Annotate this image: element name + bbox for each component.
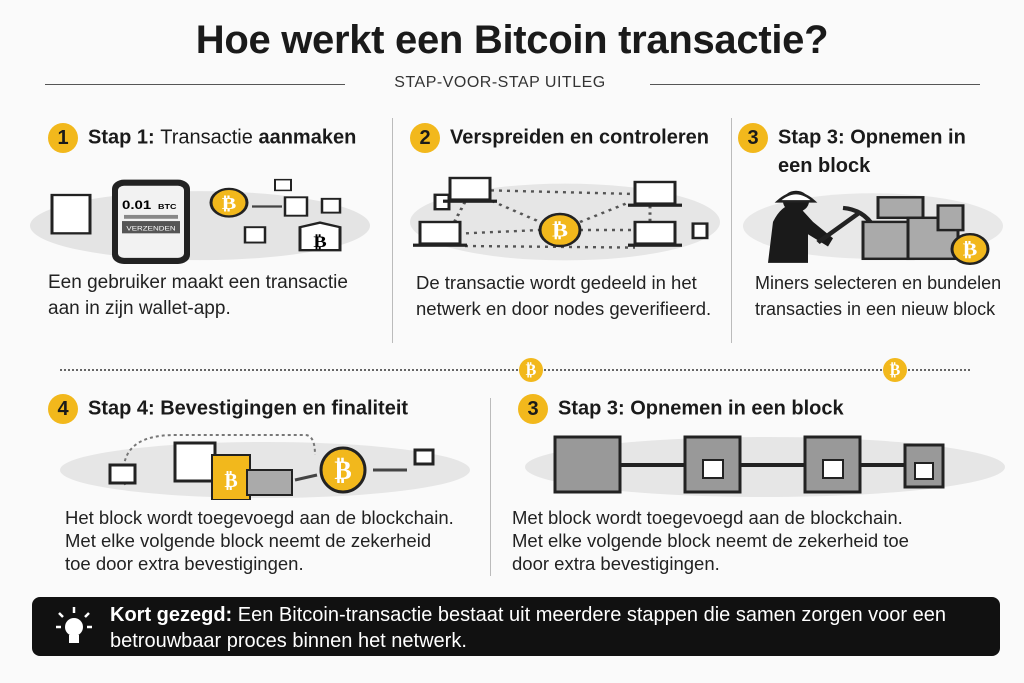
text step 2: De transactie wordt gedeeld in het bbox=[416, 272, 697, 293]
text step 4 bbox=[65, 507, 454, 574]
subtitle: STAP-VOOR-STAP UITLEG bbox=[394, 74, 606, 91]
illustration: confirmations bbox=[60, 434, 470, 500]
dotted separator with coins: ₿ bbox=[890, 360, 900, 379]
heading step 3b: Stap 3: Opnemen in een block bbox=[558, 397, 844, 419]
text step 3: transacties in een nieuw block bbox=[755, 299, 995, 319]
heading step 1 bbox=[48, 123, 356, 153]
heading step 1: 1 bbox=[57, 127, 69, 149]
summary text: betrouwbaar proces binnen het netwerk. bbox=[110, 630, 467, 652]
illustration: phone wallet: ₿ bbox=[222, 193, 236, 213]
heading step 4: 4 bbox=[57, 398, 69, 420]
text step 3b: Met block wordt toegevoegd aan de blockchain. bbox=[512, 507, 903, 528]
summary text: Kort gezegd: Een Bitcoin-transactie bestaat uit meerdere stappen die samen zorgen voor een bbox=[110, 604, 946, 626]
text step 3b bbox=[512, 507, 909, 574]
text step 4: Met elke volgende block neemt de zekerheid bbox=[65, 530, 431, 551]
dotted separator with coins: ₿ bbox=[526, 360, 536, 379]
illustration: phone wallet: BTC bbox=[158, 203, 177, 211]
heading step 2 bbox=[410, 123, 709, 153]
heading step 3: een block bbox=[778, 155, 870, 177]
text step 2: netwerk en door nodes geverifieerd. bbox=[416, 298, 711, 319]
text step 3 bbox=[755, 273, 1001, 319]
text step 3b: door extra bevestigingen. bbox=[512, 553, 720, 574]
illustration: blockchain bbox=[525, 436, 1005, 497]
text step 1: Een gebruiker maakt een transactie bbox=[48, 272, 348, 293]
illustration: network: ₿ bbox=[552, 220, 568, 242]
dotted separator with coins bbox=[60, 358, 970, 382]
text step 1 bbox=[48, 272, 348, 319]
illustration: phone wallet: 0.01 bbox=[122, 198, 152, 211]
heading step 4 bbox=[48, 394, 408, 424]
heading step 2: 2 bbox=[419, 127, 431, 149]
illustration: confirmations: ₿ bbox=[334, 456, 352, 486]
illustration: network bbox=[410, 176, 720, 260]
illustration: miner: ₿ bbox=[963, 238, 977, 260]
summary banner bbox=[32, 597, 1000, 656]
icon: lightbulb bbox=[56, 607, 92, 643]
illustration: miner bbox=[743, 190, 1003, 265]
illustration: phone wallet: VERZENDEN bbox=[126, 225, 176, 232]
heading step 3: 3 bbox=[747, 127, 759, 149]
heading step 3 bbox=[738, 123, 966, 177]
text step 3: Miners selecteren en bundelen bbox=[755, 273, 1001, 293]
text step 2 bbox=[416, 272, 711, 319]
illustration: phone wallet bbox=[30, 178, 370, 264]
text step 4: toe door extra bevestigingen. bbox=[65, 553, 304, 574]
heading step 3b: 3 bbox=[527, 398, 539, 420]
text step 1: aan in zijn wallet-app. bbox=[48, 298, 231, 319]
illustration: confirmations: ₿ bbox=[224, 468, 238, 492]
heading step 3: Stap 3: Opnemen in bbox=[778, 126, 966, 148]
heading step 1: Stap 1: Transactie aanmaken bbox=[88, 126, 356, 148]
heading step 3b bbox=[518, 394, 844, 424]
summary text bbox=[110, 604, 946, 652]
heading step 2: Verspreiden en controleren bbox=[450, 126, 709, 148]
illustration: phone wallet: ₿ bbox=[313, 233, 327, 251]
heading step 4: Stap 4: Bevestigingen en finaliteit bbox=[88, 397, 408, 419]
text step 3b: Met elke volgende block neemt de zekerheid toe bbox=[512, 530, 909, 551]
title: Hoe werkt een Bitcoin transactie? bbox=[196, 18, 828, 62]
text step 4: Het block wordt toegevoegd aan de blockchain. bbox=[65, 507, 454, 528]
